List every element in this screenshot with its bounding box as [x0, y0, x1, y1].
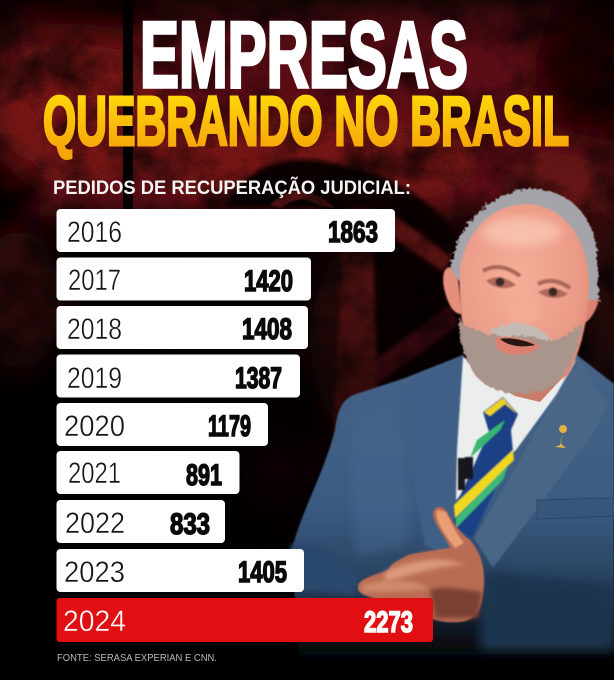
moustache [490, 323, 552, 340]
bar 2020 [56, 403, 268, 446]
bar 2018: 2018 [67, 313, 122, 346]
hair [451, 189, 599, 300]
bar 2017 [56, 258, 311, 300]
flag pole silhouette [123, 0, 133, 212]
eyes [483, 267, 570, 298]
bar 2019: 1387 [235, 362, 282, 395]
nose [507, 288, 541, 323]
forehead highlight [482, 218, 562, 246]
lapel pin [555, 425, 567, 448]
bar 2022: 2022 [65, 507, 125, 540]
bar 2022: 833 [170, 508, 210, 541]
bar 2019 [56, 354, 300, 398]
bar 2024 highlighted [56, 598, 433, 642]
breast pocket [537, 498, 614, 519]
bar 2021: 891 [186, 459, 222, 492]
flag globe silhouette [225, 159, 476, 490]
shirt collar [456, 357, 576, 500]
bar 2024 highlighted: 2273 [364, 606, 413, 639]
jacket body shading [351, 400, 408, 555]
bar 2020: 1179 [208, 410, 251, 443]
photo: man in blue suit [290, 189, 614, 680]
ears [443, 267, 462, 314]
tie [454, 397, 518, 538]
hands [358, 507, 484, 622]
bar 2020: 2020 [64, 410, 125, 443]
bar 2016 [56, 209, 395, 252]
left lapel [403, 356, 463, 560]
suit jacket [290, 355, 614, 680]
bar 2023 [56, 549, 304, 592]
bar 2017: 2017 [68, 264, 121, 297]
bar 2019: 2019 [67, 362, 122, 395]
bar chart: judicial recovery requests per year [56, 209, 433, 642]
bar 2017: 1420 [244, 265, 293, 298]
right lapel [474, 356, 608, 568]
bar 2016: 2016 [67, 216, 122, 249]
bar 2021 [56, 451, 240, 494]
bar 2018: 1408 [242, 313, 292, 346]
chart heading: PEDIDOS DE RECUPERAÇÃO JUDICIAL: [53, 177, 411, 199]
sleeve shadow [290, 544, 358, 595]
lapel microphone [458, 457, 473, 490]
bar 2016: 1863 [328, 216, 378, 249]
bar 2021: 2021 [68, 457, 121, 490]
bar 2024 highlighted: 2024 [63, 605, 126, 638]
mouth [495, 337, 540, 355]
bar 2018 [56, 306, 308, 349]
face [460, 204, 589, 389]
bar 2023: 1405 [238, 556, 287, 589]
beard [459, 315, 581, 394]
neck [480, 375, 565, 402]
source note: FONTE: SERASA EXPERIAN E CNN. [57, 652, 217, 664]
bar 2022 [56, 500, 225, 543]
bar 2023: 2023 [64, 556, 125, 589]
